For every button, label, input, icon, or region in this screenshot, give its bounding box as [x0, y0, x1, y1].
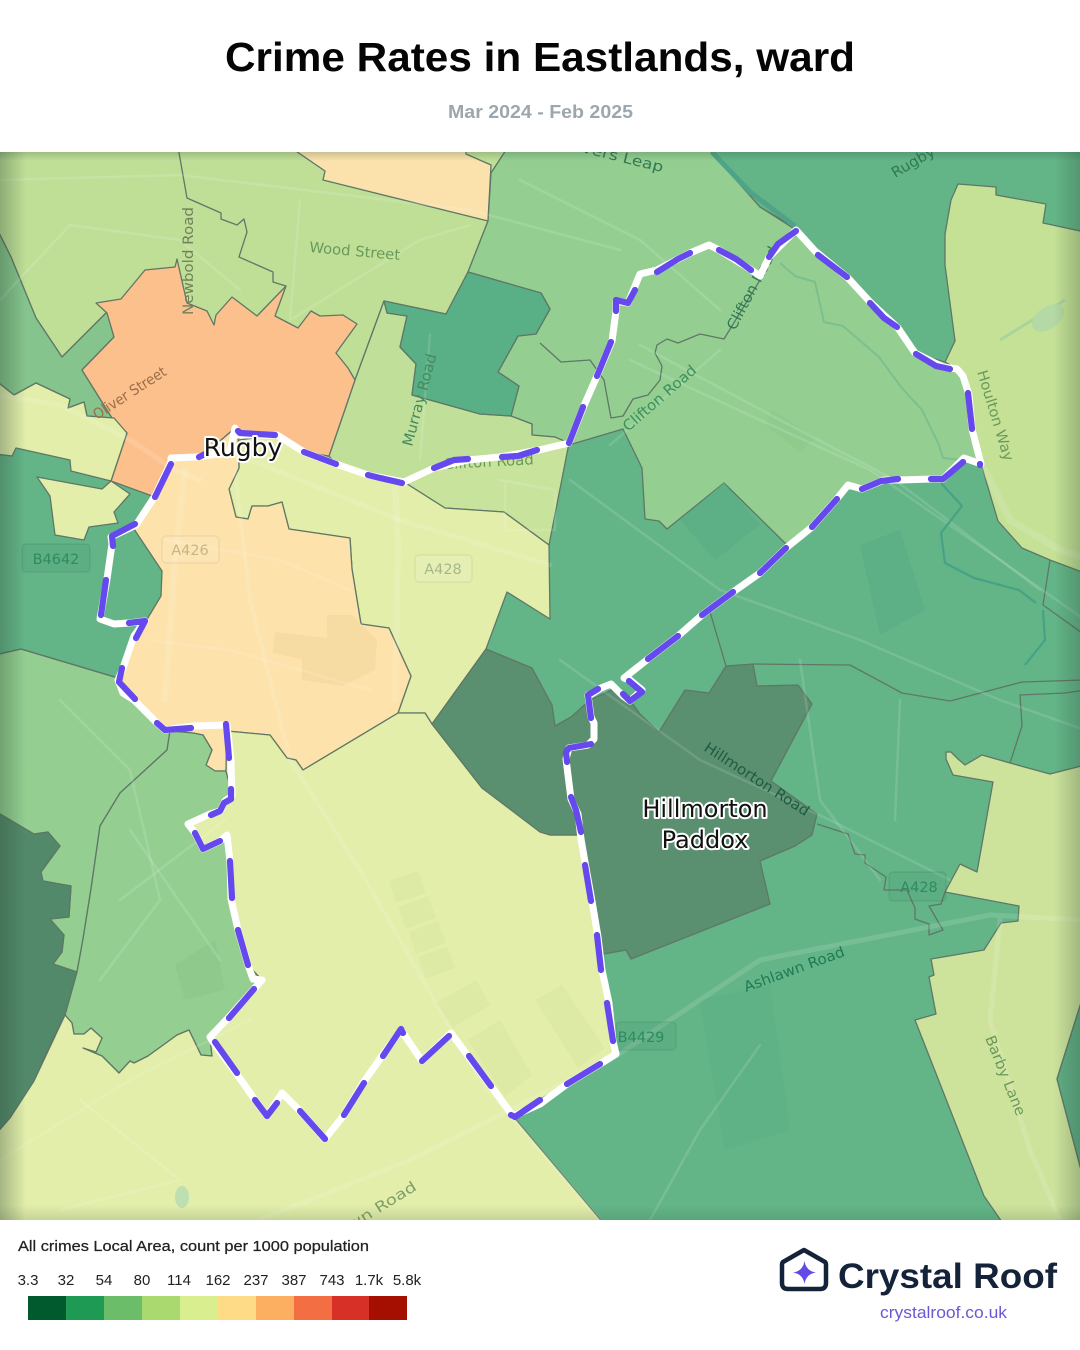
icon: house outline with star: [782, 1250, 826, 1289]
road label: Newbold Road: Newbold Road: [181, 207, 197, 315]
road badge: A428 east: A428: [900, 880, 938, 896]
road network: [0, 175, 1080, 1220]
map edge vignette: [0, 152, 1080, 1220]
place label: Hillmorton Paddox: [642, 795, 768, 854]
legend colour bar: [28, 1296, 407, 1320]
legend: [18, 1238, 422, 1320]
road label: Clifton Road upper: Clifton Road: [724, 244, 782, 333]
area: south of Clifton Road zone: [404, 443, 569, 545]
road badge: B4429: B4429: [618, 1030, 664, 1046]
road badge: B4642: B4642: [33, 552, 79, 568]
road label: Clifton Road: Clifton Road: [620, 363, 700, 435]
legend scale values: 32: [58, 1272, 74, 1289]
legend scale values: 387: [281, 1272, 307, 1289]
area: west light green zone: [0, 225, 114, 418]
road badge: B4642: [22, 544, 90, 572]
area: south-east yellow-green zone: [915, 752, 1080, 1225]
legend title: All crimes Local Area, count per 1000 population: [18, 1238, 369, 1255]
zone borders inside green areas: [0, 147, 1080, 935]
area: bottom-right dark wedge: [1056, 1004, 1080, 1168]
logo: Crystal Roof: [782, 1250, 1057, 1322]
legend scale values: 162: [205, 1272, 231, 1289]
road badge: A428 east: [889, 872, 946, 901]
road label: Oliver Street: Oliver Street: [90, 364, 170, 423]
place label: Hillmorton Paddox: Hillmorton: [642, 795, 768, 823]
area: east yellow-green zone: [945, 184, 1080, 573]
area: north central light green zone: [468, 147, 981, 544]
area: dark green block by Murray Road: [384, 272, 550, 416]
building blocks and fields: [175, 483, 728, 1208]
area: southern light green zone: [65, 731, 262, 1073]
streams: [712, 152, 1069, 665]
road badge: A426: [162, 536, 219, 563]
road label: Rivers Leap: Rivers Leap: [564, 136, 665, 176]
area: Murray Road yellow-green zone: [329, 301, 569, 482]
road label: Houlton Way: Houlton Way: [973, 368, 1016, 463]
ward boundary: purple dashes: [101, 231, 980, 1139]
website link: crystalroof.co.uk: [880, 1304, 1008, 1322]
road label: Ashlawn Road: Ashlawn Road: [742, 944, 847, 996]
legend scale values: 54: [96, 1272, 112, 1289]
legend scale values: [18, 1272, 422, 1289]
place label: Rugby: Rugby: [204, 433, 283, 462]
legend scale values: 80: [134, 1272, 150, 1289]
road badge: A428 west: A428: [424, 562, 462, 578]
title: Crime Rates in Eastlands, ward: [225, 34, 855, 80]
area: Hillmorton dark green zone: [432, 649, 817, 959]
area: far west dark green zone: [0, 811, 77, 1135]
area: north-west yellow-green zones: [0, 147, 508, 456]
legend scale values: 743: [319, 1272, 345, 1289]
road badge: A426: A426: [171, 543, 209, 559]
legend scale values: 114: [167, 1272, 191, 1289]
road badge: A428 west: [415, 555, 472, 582]
area: peach central zone: [118, 428, 411, 771]
legend scale values: 237: [243, 1272, 269, 1289]
area: top peach zone: [290, 147, 491, 221]
area: south-west light green zone: [0, 649, 170, 972]
road label: Hillmorton Road: Hillmorton Road: [701, 740, 812, 820]
ward boundary: white base line: [100, 230, 981, 1139]
road badge: B4429: [616, 1022, 676, 1050]
place label: Hillmorton Paddox: Paddox: [662, 826, 748, 854]
legend scale values: 1.7k: [355, 1272, 384, 1289]
legend scale values: 5.8k: [393, 1272, 422, 1289]
road label: Murray Road: Murray Road: [400, 352, 440, 448]
road label: Wood Street: Wood Street: [309, 240, 401, 264]
area: southern pale yellow zone: [0, 713, 616, 1225]
road label: Ashlawn Road south: Ashlawn Road: [303, 1179, 420, 1260]
road label: Rugby Road: Rugby Road: [889, 123, 975, 181]
legend scale values: 3.3: [18, 1272, 38, 1289]
area: central pale yellow zone: [229, 435, 550, 724]
road label: Clifton Road hidden segment: Clifton Road: [443, 452, 534, 473]
logo wordmark: Crystal Roof: [838, 1257, 1057, 1296]
road label: Barby Lane: Barby Lane: [981, 1034, 1028, 1118]
area: orange town centre zone: [82, 259, 357, 497]
area: west pale yellow pocket: [37, 477, 130, 540]
subtitle: date range: Mar 2024 - Feb 2025: [448, 102, 633, 122]
area: west pale yellow zone: [0, 380, 127, 481]
